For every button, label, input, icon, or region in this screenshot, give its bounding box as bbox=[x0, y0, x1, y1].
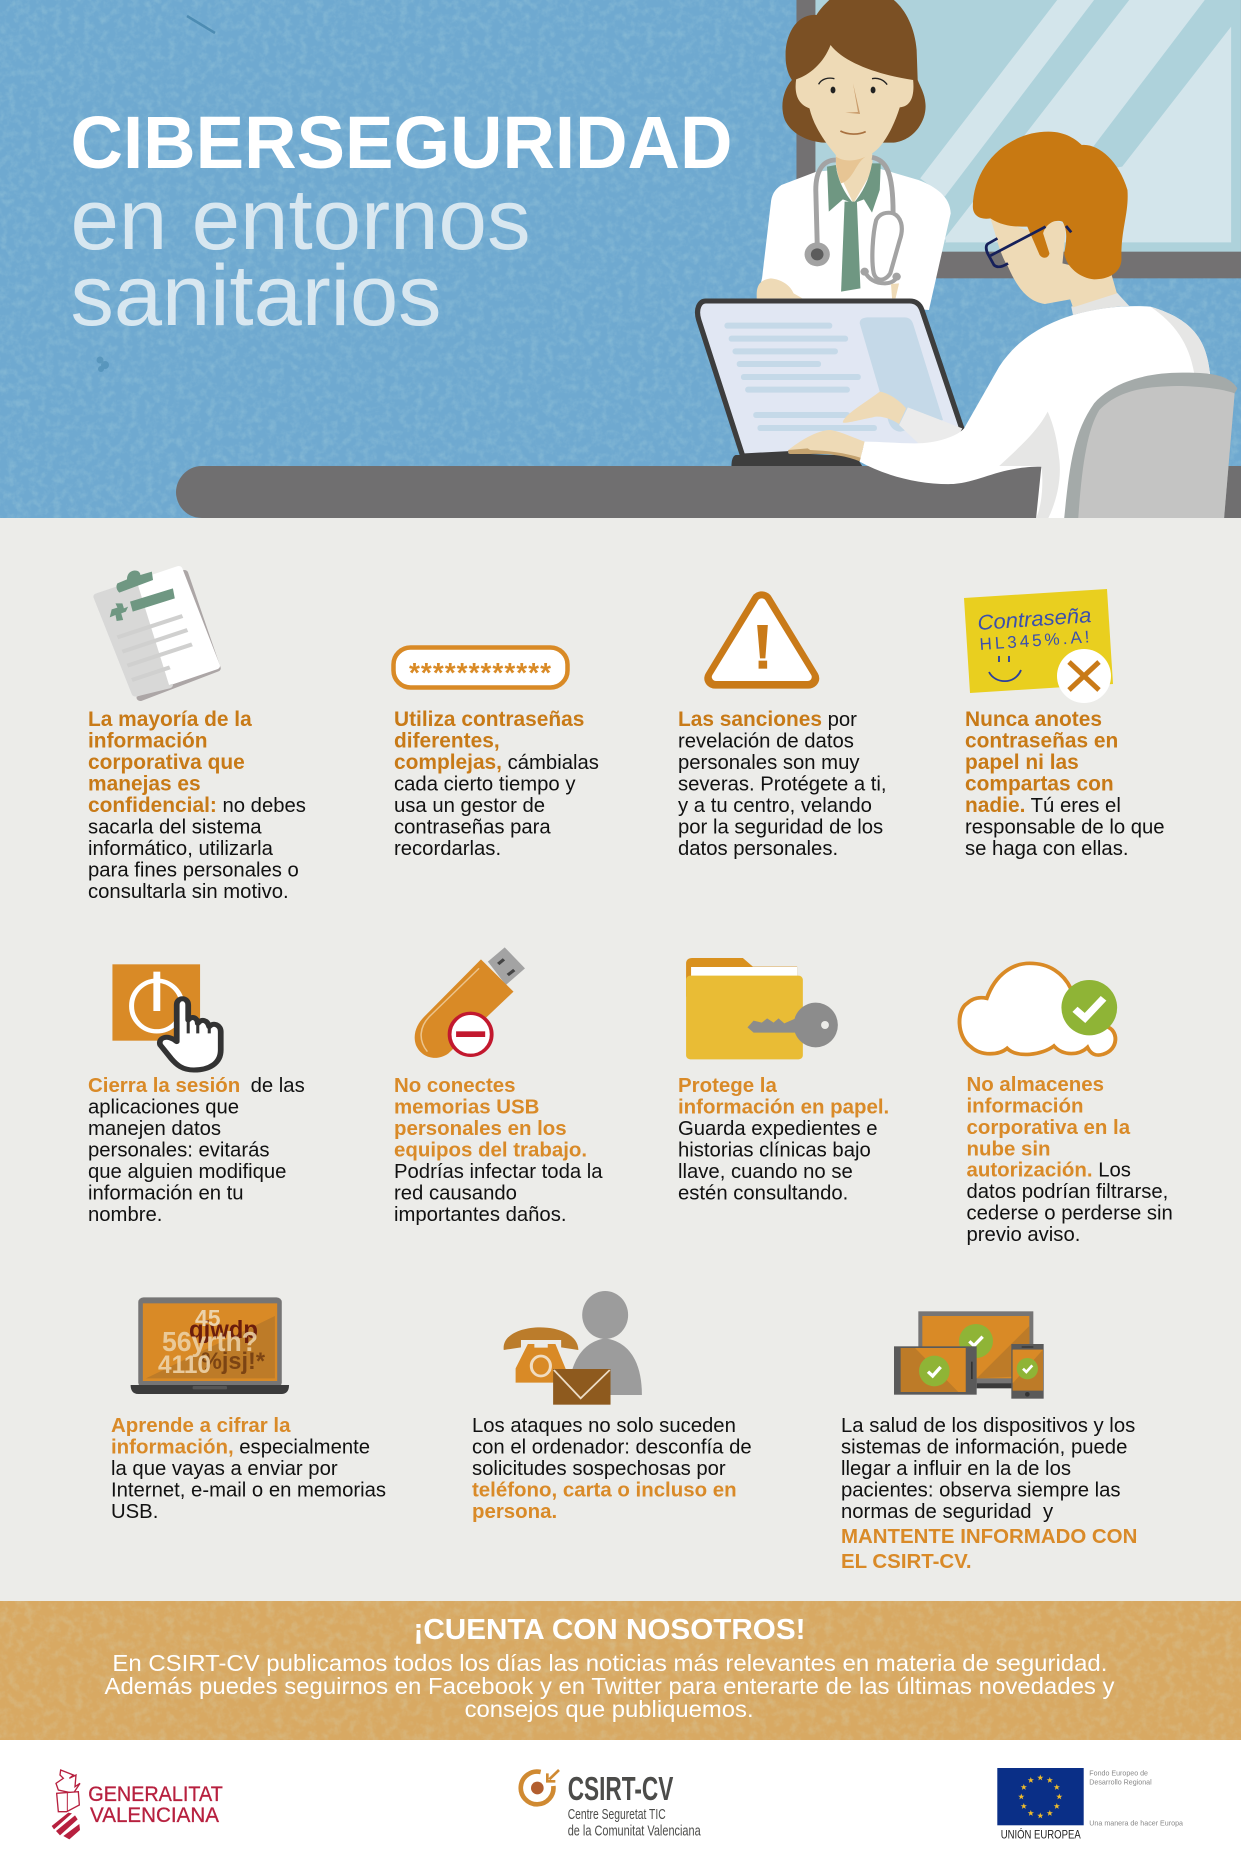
panel: tip 7 paper protection bbox=[678, 958, 889, 1204]
text: tip 10: teléfono, carta o incluso en bbox=[472, 1478, 737, 1502]
text: tip 4: se haga con ellas. bbox=[965, 838, 1128, 860]
banner text: consejos que publiquemos. bbox=[465, 1696, 754, 1722]
text: tip 2: contraseñas para bbox=[394, 816, 551, 838]
text: tip 4: compartas con bbox=[965, 772, 1114, 796]
text: tip 2: Utiliza contraseñas bbox=[394, 708, 584, 731]
text: tip 2: usa un gestor de bbox=[394, 795, 545, 817]
text: tip 4 bbox=[965, 708, 1165, 860]
panel: tip 8 cloud bbox=[960, 963, 1173, 1246]
illustration: doctor bbox=[757, 0, 951, 310]
panel: tip 3 sanctions bbox=[678, 602, 887, 860]
icon: laptop with encrypted text: %jsj!* bbox=[201, 1348, 266, 1375]
logo: CSIRT-CV: Centre Seguretat TIC bbox=[568, 1806, 666, 1823]
text: tip 9: información, especialmente bbox=[111, 1436, 370, 1458]
banner text bbox=[104, 1650, 1115, 1722]
text: tip 8: nube sin bbox=[966, 1137, 1051, 1160]
text: tip 8: información bbox=[966, 1094, 1083, 1117]
text: tip 11: pacientes: observa siempre las bbox=[841, 1480, 1121, 1502]
panel: tip 10 other attacks bbox=[472, 1291, 752, 1523]
text: tip 5: que alguien modifique bbox=[88, 1161, 286, 1183]
text: tip 11 bbox=[841, 1415, 1137, 1573]
hero textured blue background bbox=[0, 0, 1241, 518]
text: tip 1: para fines personales o bbox=[88, 860, 299, 882]
illustration: seated man bbox=[788, 132, 1237, 518]
text: tip 1: confidencial: no debes bbox=[88, 794, 306, 817]
text: tip 2 bbox=[394, 708, 599, 860]
logo: Generalitat Valenciana bbox=[52, 1770, 223, 1839]
text: tip 5: de las bbox=[251, 1075, 305, 1097]
banner textured background bbox=[0, 1601, 1241, 1740]
icon: sticky note with cross: HL345%.A! bbox=[979, 627, 1090, 654]
icon: laptop with encrypted text: 45 bbox=[195, 1305, 221, 1331]
text: tip 10: persona. bbox=[472, 1500, 557, 1523]
text: tip 1: corporativa que bbox=[88, 751, 245, 774]
text: tip 11: La salud de los dispositivos y los bbox=[841, 1415, 1135, 1437]
text: tip 8: No almacenes bbox=[966, 1073, 1104, 1096]
text: tip 8: cederse o perderse sin bbox=[966, 1203, 1173, 1225]
title: CIBERSEGURIDAD bbox=[70, 101, 732, 184]
icon: password field: ************ bbox=[409, 657, 551, 688]
icon: laptop with encrypted text: qjwdp bbox=[189, 1316, 258, 1344]
panel: tip 6 USB bbox=[394, 947, 603, 1226]
text: tip 2: recordarlas. bbox=[394, 838, 501, 860]
illustration: laptop bbox=[698, 301, 962, 466]
text: tip 5: información en tu bbox=[88, 1182, 244, 1204]
panel: tip 5 close session bbox=[88, 964, 305, 1226]
text: tip 1: información bbox=[88, 730, 208, 752]
text: tip 4: papel ni las bbox=[965, 751, 1079, 774]
icon: folder with key bbox=[686, 958, 838, 1059]
text: tip 6: equipos del trabajo. bbox=[394, 1138, 587, 1162]
icon: warning triangle bbox=[715, 602, 808, 678]
text: tip 9: USB. bbox=[111, 1501, 158, 1523]
text: tip 2: diferentes, bbox=[394, 730, 500, 752]
text: tip 1: La mayoría de la bbox=[88, 708, 252, 731]
text: tip 6: No conectes bbox=[394, 1074, 516, 1097]
text: tip 1 bbox=[88, 708, 306, 903]
text: tip 9: la que vayas a enviar por bbox=[111, 1458, 338, 1480]
illustration: table bbox=[176, 466, 1241, 518]
icon: telephone, person and envelope bbox=[504, 1291, 642, 1405]
text: tip 11: y bbox=[1043, 1501, 1054, 1523]
text: tip 3 bbox=[678, 708, 887, 860]
text: tip 5: nombre. bbox=[88, 1204, 162, 1226]
text: tip 3: personales son muy bbox=[678, 752, 860, 774]
text: tip 8: corporativa en la bbox=[966, 1116, 1131, 1139]
text: tip 1: consultarla sin motivo. bbox=[88, 881, 289, 903]
title: en entornos bbox=[70, 172, 530, 268]
logo: CSIRT-CV bbox=[521, 1770, 701, 1840]
panel: tip 4 never write passwords bbox=[964, 589, 1165, 860]
text: tip 7: estén consultando. bbox=[678, 1182, 848, 1204]
text: tip 5: personales: evitarás bbox=[88, 1140, 270, 1162]
text: tip 9: Internet, e-mail o en memorias bbox=[111, 1480, 386, 1502]
text: tip 2: cada cierto tiempo y bbox=[394, 774, 576, 796]
illustration: window bbox=[796, 0, 1241, 278]
text: tip 4: Nunca anotes bbox=[965, 708, 1102, 731]
text: tip 7: llave, cuando no se bbox=[678, 1161, 853, 1183]
text: tip 8: datos podrían filtrarse, bbox=[966, 1181, 1168, 1203]
banner text: Además puedes seguirnos en Facebook y en Twitter para enterarte de las últimas novedades y bbox=[104, 1673, 1115, 1699]
text: tip 4: contraseñas en bbox=[965, 730, 1118, 752]
text: tip 4: responsable de lo que bbox=[965, 816, 1165, 838]
text: tip 8: autorización. Los bbox=[966, 1159, 1131, 1182]
text: tip 6: importantes daños. bbox=[394, 1204, 566, 1226]
panel: tip 2 passwords bbox=[394, 648, 599, 860]
text: tip 3: severas. Protégete a ti, bbox=[678, 774, 887, 796]
text: tip 11: normas de seguridad bbox=[841, 1501, 1032, 1523]
text: tip 10: con el ordenador: desconfía de bbox=[472, 1436, 752, 1458]
text: tip 6: memorias USB bbox=[394, 1096, 539, 1118]
banner text: En CSIRT-CV publicamos todos los días las noticias más relevantes en materia de seguridad. bbox=[112, 1650, 1107, 1676]
text: tip 7: Protege la bbox=[678, 1074, 777, 1097]
text: tip 7: historias clínicas bajo bbox=[678, 1140, 871, 1162]
text: tip 9 bbox=[111, 1414, 386, 1523]
logo: European Union bbox=[997, 1768, 1184, 1841]
icon: clipboard bbox=[97, 569, 217, 698]
text: tip 10: Los ataques no solo suceden bbox=[472, 1415, 736, 1437]
text: tip 6 bbox=[394, 1074, 603, 1226]
footer white background bbox=[0, 1740, 1241, 1862]
logo: CSIRT-CV: CSIRT-CV bbox=[568, 1770, 673, 1807]
icon: monitor, tablet and phone with checks bbox=[894, 1311, 1044, 1399]
panel: contact banner bbox=[0, 1601, 1241, 1740]
text: tip 11: EL CSIRT-CV. bbox=[841, 1550, 972, 1573]
text: tip 11: llegar a influir en la de los bbox=[841, 1458, 1071, 1480]
text: tip 6: personales en los bbox=[394, 1117, 567, 1140]
panel: tip 11 device health bbox=[841, 1311, 1137, 1573]
text: tip 3: y a tu centro, velando bbox=[678, 795, 872, 817]
text: tip 8 bbox=[966, 1073, 1173, 1246]
text: tip 6: red causando bbox=[394, 1182, 517, 1204]
icon: cloud with check bbox=[960, 963, 1117, 1055]
text: tip 11: sistemas de información, puede bbox=[841, 1436, 1127, 1458]
icon: laptop with encrypted text: 4110 bbox=[158, 1351, 211, 1379]
text: tip 1: informático, utilizarla bbox=[88, 838, 274, 860]
text: tip 7 bbox=[678, 1074, 889, 1204]
text: tip 9: Aprende a cifrar la bbox=[111, 1414, 291, 1437]
panel: tip 1 confidential information bbox=[88, 569, 306, 903]
text: tip 1: sacarla del sistema bbox=[88, 816, 262, 838]
text: tip 5: aplicaciones que bbox=[88, 1096, 239, 1118]
text: tip 10 bbox=[472, 1415, 752, 1523]
text: tip 3: datos personales. bbox=[678, 838, 838, 860]
text: tip 3: Las sanciones por bbox=[678, 708, 857, 731]
text: tip 11: MANTENTE INFORMADO CON bbox=[841, 1525, 1137, 1548]
text: tip 10: solicitudes sospechosas por bbox=[472, 1458, 726, 1480]
panel: footer logos bbox=[0, 1740, 1241, 1862]
logo: CSIRT-CV: de la Comunitat Valenciana bbox=[568, 1823, 701, 1840]
banner heading: ¡CUENTA CON NOSOTROS! bbox=[414, 1614, 806, 1646]
text: tip 1: manejas es bbox=[88, 772, 201, 796]
icon: sticky note with cross bbox=[964, 589, 1113, 703]
text: tip 5: manejen datos bbox=[88, 1118, 221, 1140]
text: tip 3: revelación de datos bbox=[678, 730, 854, 752]
logo: European Union: Una manera de hacer Europa bbox=[1089, 1818, 1184, 1827]
icon: laptop with encrypted text bbox=[131, 1297, 289, 1394]
logo: European Union: Fondo Europeo de bbox=[1089, 1769, 1148, 1778]
logo: European Union: UNIÓN EUROPEA bbox=[1001, 1828, 1081, 1841]
text: tip 8: previo aviso. bbox=[966, 1224, 1080, 1246]
text: tip 7: Guarda expedientes e bbox=[678, 1118, 878, 1140]
icon: power button and hand bbox=[112, 964, 221, 1070]
panel: hero header bbox=[0, 0, 1241, 518]
title: sanitarios bbox=[70, 248, 442, 344]
icon: USB drive with stop sign bbox=[415, 947, 525, 1058]
text: tip 5: Cierra la sesión bbox=[88, 1074, 240, 1097]
text: tip 4: nadie. Tú eres el bbox=[965, 794, 1121, 817]
icon: password field bbox=[394, 648, 568, 688]
text: tip 5 bbox=[88, 1074, 305, 1226]
text: tip 7: información en papel. bbox=[678, 1096, 889, 1118]
logo: Generalitat Valenciana: GENERALITAT bbox=[88, 1783, 223, 1806]
text: tip 2: complejas, cámbialas bbox=[394, 751, 599, 774]
title bbox=[70, 101, 732, 344]
icon: sticky note with cross: Contraseña bbox=[977, 604, 1092, 635]
text: tip 6: Podrías infectar toda la bbox=[394, 1161, 603, 1183]
text: tip 3: por la seguridad de los bbox=[678, 816, 883, 838]
logo: Generalitat Valenciana: VALENCIANA bbox=[90, 1804, 219, 1827]
panel: tip 9 encryption bbox=[111, 1297, 386, 1523]
logo: European Union: Desarrollo Regional bbox=[1089, 1777, 1152, 1786]
icon: laptop with encrypted text: 56yrth? bbox=[162, 1326, 258, 1357]
